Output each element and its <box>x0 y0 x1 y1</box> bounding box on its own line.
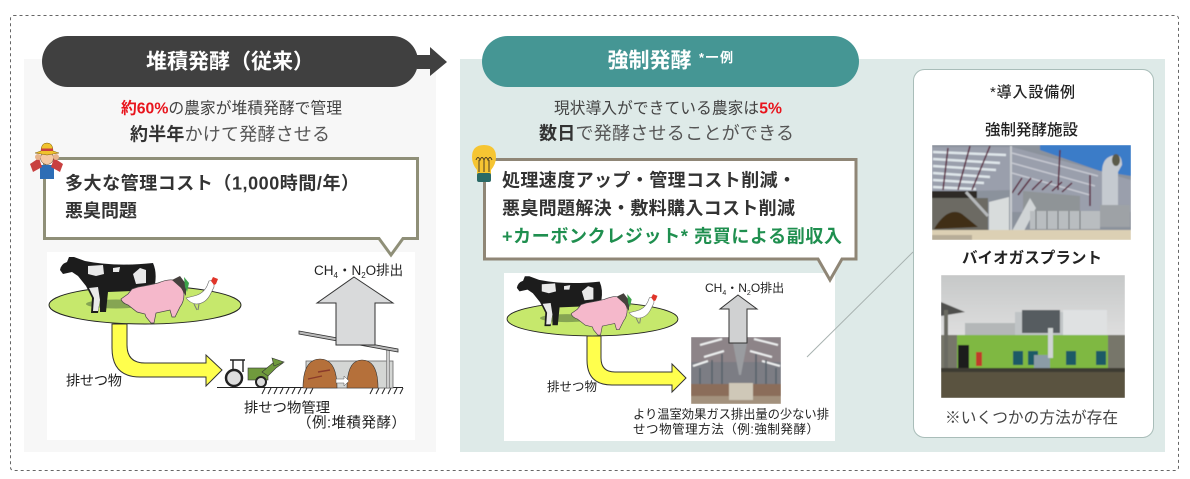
illustration: forced fermentation manure management <box>504 273 835 441</box>
card title: *導入設備例 <box>990 83 1075 101</box>
arrow: conventional to forced <box>417 47 447 76</box>
label: lower emission method <box>633 408 829 436</box>
label: CH4 N2O emission: 4 <box>334 271 338 280</box>
callout: benefits <box>484 160 856 280</box>
callout: benefits: 処理速度アップ・管理コスト削減・ <box>502 170 796 190</box>
arrow: yellow manure flow <box>587 336 686 392</box>
icon: light bulb <box>472 145 496 182</box>
label: manure: 排せつ物 <box>66 374 122 390</box>
label: CH4 N2O emission: CH <box>314 263 334 278</box>
label: CH4 N2O emission: ・N <box>338 263 361 278</box>
callout: benefits: 悪臭問題解決・敷料購入コスト削減 <box>502 198 795 218</box>
label: CH4 N2O emission: 4 <box>722 290 726 297</box>
label: CH4 N2O emission: 2 <box>361 271 366 280</box>
heading: biogas plant: バイオガスプラント <box>962 249 1102 267</box>
photo: fermentation barn <box>691 337 781 404</box>
composting shed <box>299 331 398 388</box>
panel: conventional composting <box>24 36 436 452</box>
text: share of farmers: 約60%の農家が堆積発酵で管理 <box>121 100 342 118</box>
label: CH4 N2O emission: O排出 <box>366 263 403 278</box>
panel: forced fermentation <box>460 36 1165 452</box>
heading pill: conventional: 堆積発酵（従来） <box>146 50 314 74</box>
photo: biogas plant <box>941 275 1125 398</box>
text: half-year fermentation: 約半年かけて発酵させる <box>130 124 330 144</box>
label: lower emission method: せつ物管理方法（例:強制発酵） <box>633 422 819 436</box>
icon: worried farmer <box>30 143 63 179</box>
label: manure management: 排せつ物管理 <box>244 400 330 416</box>
text: adoption share: 現状導入ができている農家は5% <box>554 98 782 118</box>
arrow: yellow manure flow <box>112 324 222 386</box>
heading pill: conventional <box>42 36 418 87</box>
card: equipment examples <box>914 70 1154 438</box>
label: lower emission method: より温室効果ガス排出量の少ない排 <box>633 408 829 422</box>
label: CH4 N2O emission: 2 <box>747 290 751 297</box>
label: manure: 排せつ物 <box>547 380 597 394</box>
illustration: conventional manure management <box>47 252 415 440</box>
callout: problems <box>44 158 418 255</box>
arrow: emissions up <box>317 277 393 345</box>
ground lines <box>217 388 403 394</box>
text: days to ferment: 数日で発酵させることができる <box>539 124 794 144</box>
label: CH4 N2O emission: CH <box>705 281 722 295</box>
label: example composting: （例:堆積発酵） <box>297 414 406 432</box>
photo: forced fermentation facility <box>932 145 1131 240</box>
heading pill: forced: 強制発酵 <box>608 50 692 72</box>
heading: forced fermentation facility: 強制発酵施設 <box>985 121 1078 139</box>
callout: problems: 多大な管理コスト（1,000時間/年） <box>65 172 359 194</box>
note: several methods exist: ※いくつかの方法が存在 <box>945 409 1118 427</box>
heading pill: forced <box>482 36 859 87</box>
label: CH4 N2O emission: ・N <box>726 281 747 295</box>
icon: tractor <box>226 358 284 387</box>
label: CH4 N2O emission: O排出 <box>751 281 784 295</box>
callout: problems: 悪臭問題 <box>65 201 137 221</box>
connector line <box>807 252 913 357</box>
arrow: emissions up <box>720 295 757 343</box>
callout: benefits: +カーボンクレジット* 売買による副収入 <box>502 226 842 246</box>
heading pill: forced: *一例 <box>699 50 733 65</box>
